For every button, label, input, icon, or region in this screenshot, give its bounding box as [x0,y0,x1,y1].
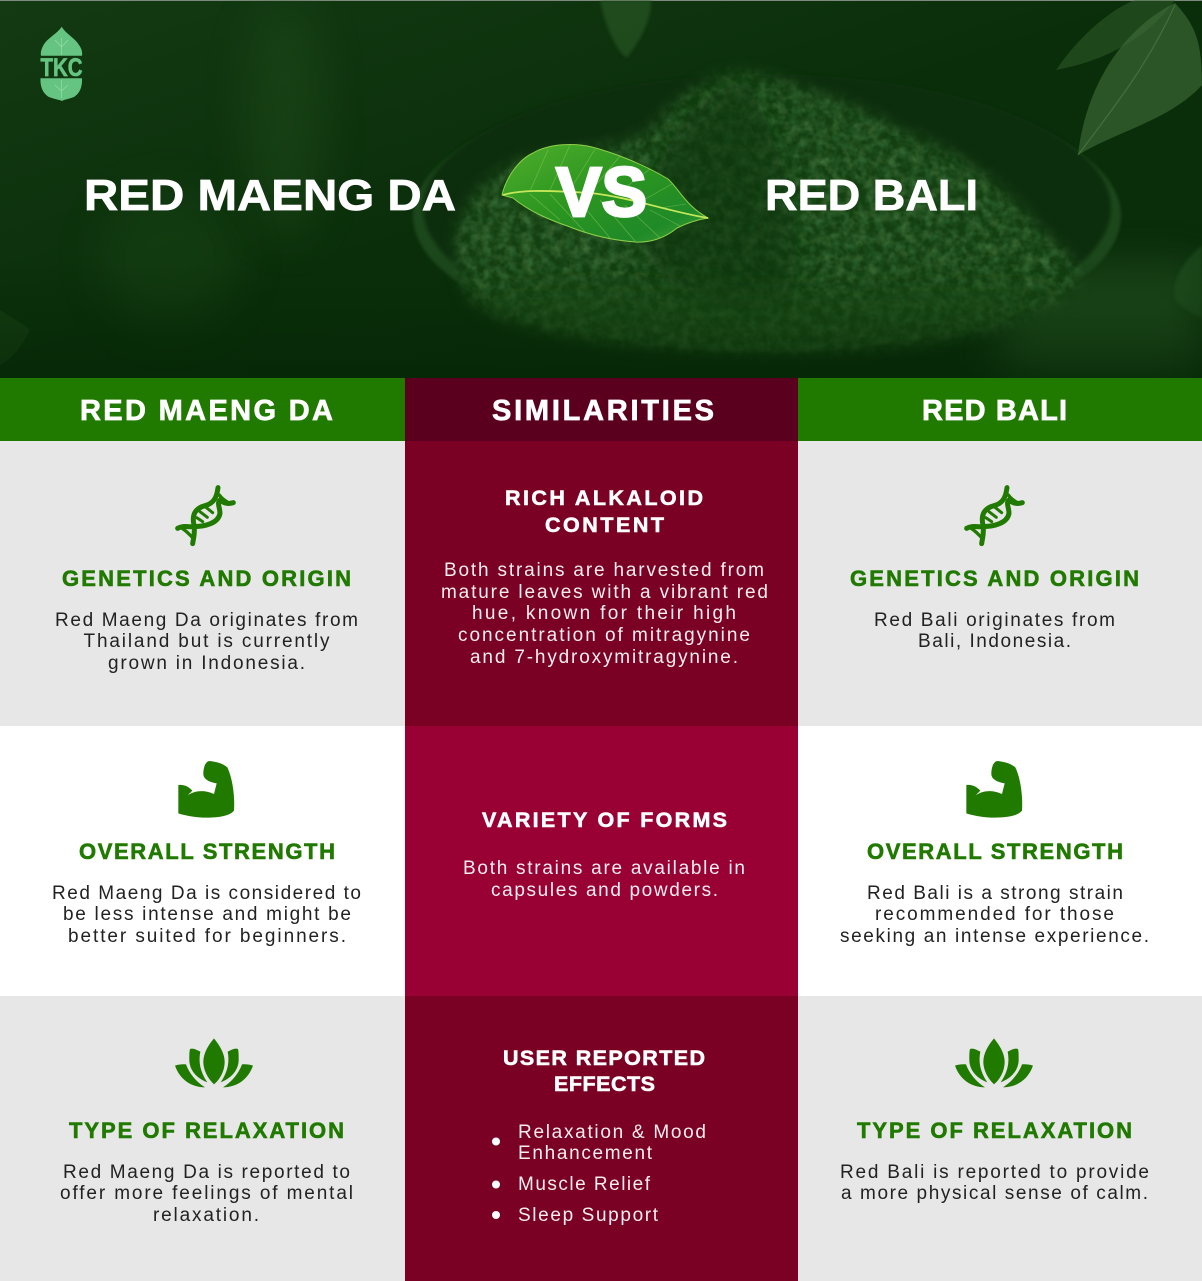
bullet list [492,1122,706,1226]
heading [505,486,703,537]
panel: column backgrounds [0,441,1202,1281]
text block: Red Maeng Da originates from [55,610,358,631]
text block: offer more feelings of mental [60,1183,353,1204]
text block: mature leaves with a vibrant red [441,582,768,603]
heading [503,1046,705,1096]
text block: Red Maeng Da is reported to [63,1162,350,1183]
column header: Similarities: SIMILARITIES [492,395,714,427]
text block [463,858,745,901]
text block: better suited for beginners. [68,926,346,947]
text block: Both strains are harvested from [444,560,764,581]
text block: Red Bali is reported to provide [840,1162,1149,1183]
column header: Similarities [405,378,798,441]
bullet list: Relaxation & Mood [518,1122,706,1143]
panel: strength, Red Bali [840,761,1149,947]
bullet list: Enhancement [518,1143,653,1164]
panel: genetics, Red Maeng Da [55,488,358,674]
column header: Red Maeng Da [0,378,405,441]
text block [840,883,1149,947]
icon: lotus [955,1038,1033,1087]
text block [60,1162,353,1226]
heading: CONTENT [545,513,664,537]
text block: Thailand but is currently [84,631,330,652]
column header: Red Maeng Da: RED MAENG DA [80,395,333,427]
heading: TYPE OF RELAXATION [69,1118,344,1143]
text block: seeking an intense experience. [840,926,1149,947]
panel: user reported effects [492,1046,706,1226]
icon: DNA [178,488,233,544]
text block: hue, known for their high [472,603,736,624]
icon: flexed arm [966,761,1022,818]
text block [874,610,1115,652]
icon: green leaf [502,145,708,242]
text block [52,883,361,947]
hero title: Red Maeng Da: RED MAENG DA [84,171,456,220]
panel: strength, Red Maeng Da [52,761,361,947]
icon: DNA [967,488,1022,544]
heading: EFFECTS [554,1072,655,1096]
hero banner [0,0,1202,380]
logo: TKC leaf [40,27,82,101]
bullet list: Muscle Relief [518,1174,651,1195]
heading: VARIETY OF FORMS [482,808,727,832]
icon: lotus [175,1038,253,1087]
heading: RICH ALKALOID [505,486,703,510]
column header: Red Bali [798,378,1202,441]
text block: capsules and powders. [491,880,718,901]
text block: a more physical sense of calm. [841,1183,1148,1204]
heading: USER REPORTED [503,1046,705,1070]
icon: flexed arm [178,761,234,818]
VS label: VS [556,153,647,231]
text block: Red Maeng Da is considered to [52,883,361,904]
text block: and 7-hydroxymitragynine. [470,647,738,668]
panel: relaxation, Red Bali [840,1038,1149,1204]
text block [840,1162,1149,1204]
bowl of powder [412,68,1122,354]
heading: OVERALL STRENGTH [79,839,335,864]
text block: Red Bali originates from [874,610,1115,631]
text block: concentration of mitragynine [458,625,750,646]
text block [441,560,768,668]
text block: Red Bali is a strong strain [867,883,1123,904]
heading: GENETICS AND ORIGIN [850,566,1139,591]
blurred background plant [100,0,1202,378]
logo: TKC leaf: TKC [40,54,82,82]
text block: Bali, Indonesia. [918,631,1071,652]
text block: Both strains are available in [463,858,745,879]
text block: recommended for those [875,904,1114,925]
panel: relaxation, Red Maeng Da [60,1038,353,1226]
text block: be less intense and might be [63,904,351,925]
text block: relaxation. [153,1205,259,1226]
text block: grown in Indonesia. [108,653,305,674]
bullet list: Sleep Support [518,1205,659,1226]
heading: TYPE OF RELAXATION [857,1118,1132,1143]
hero title: Red Bali: RED BALI [765,171,978,220]
heading: OVERALL STRENGTH [867,839,1123,864]
text block [55,610,358,674]
column header: Red Bali: RED BALI [922,395,1067,427]
panel: genetics, Red Bali [850,488,1139,652]
faded leaves [0,0,1202,365]
heading: GENETICS AND ORIGIN [62,566,351,591]
panel: rich alkaloid content [441,486,768,668]
panel: variety of forms [463,808,745,901]
